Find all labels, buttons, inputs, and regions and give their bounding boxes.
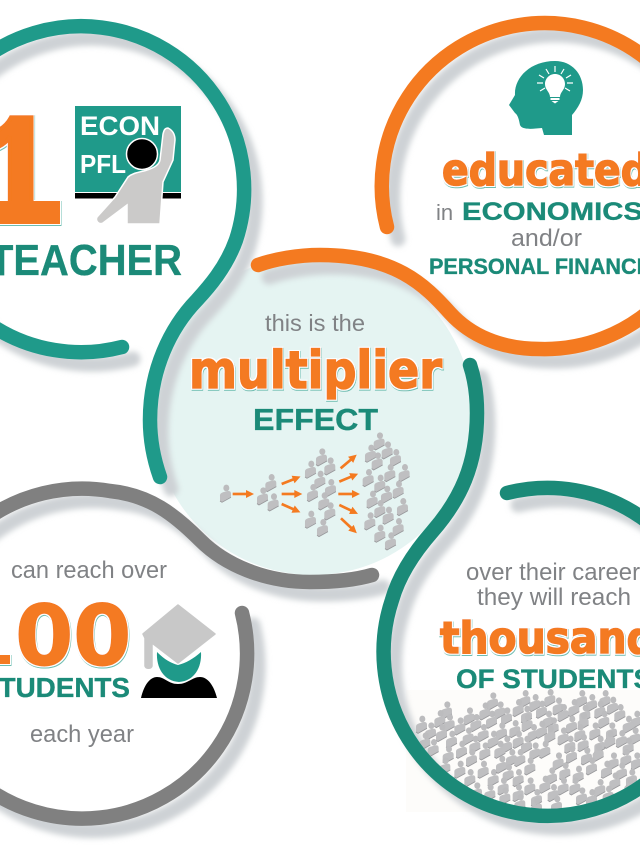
ring: educated orange outline: [258, 23, 640, 349]
icon: head with light bulb: [509, 61, 583, 135]
crowd backdrop tile: [406, 690, 640, 812]
number 100: 0: [73, 587, 131, 685]
text: this is the: this is the: [265, 310, 365, 336]
heading: effect: EFFECT: [253, 402, 378, 437]
text: in economics: in: [436, 200, 453, 225]
panel: multiplier effect: [189, 310, 442, 550]
icon: chalkboard with teacher: PFL: [80, 149, 126, 179]
icon: chalkboard with teacher: ECON: [80, 111, 160, 141]
text: each year: each year: [30, 721, 134, 748]
icon: chalkboard with teacher: [75, 106, 181, 224]
ring: teacher teal outline: [0, 26, 244, 477]
heading: multiplier: multiplier: [189, 341, 442, 401]
ring: thousands dark teal outline: [384, 365, 640, 816]
panel: multiplier circle background: [153, 255, 473, 575]
panel: teacher: [0, 90, 182, 285]
text: they will reach: they will reach: [477, 584, 631, 611]
text: can reach over: can reach over: [11, 557, 167, 584]
ring: students gray outline: [0, 489, 372, 819]
diagram: people multiplying with arrows: [220, 432, 410, 550]
panel: educated: [429, 61, 640, 279]
panel: thousands of students: [416, 559, 640, 815]
panel: students per year: [0, 557, 217, 748]
text: and/or: and/or: [511, 225, 582, 252]
number 100: [0, 587, 131, 685]
icon: graduate: [141, 605, 217, 698]
text: in economics: ECONOMICS: [462, 198, 640, 226]
number 100: 0: [15, 587, 73, 685]
graphic: crowd of people: [416, 689, 640, 815]
